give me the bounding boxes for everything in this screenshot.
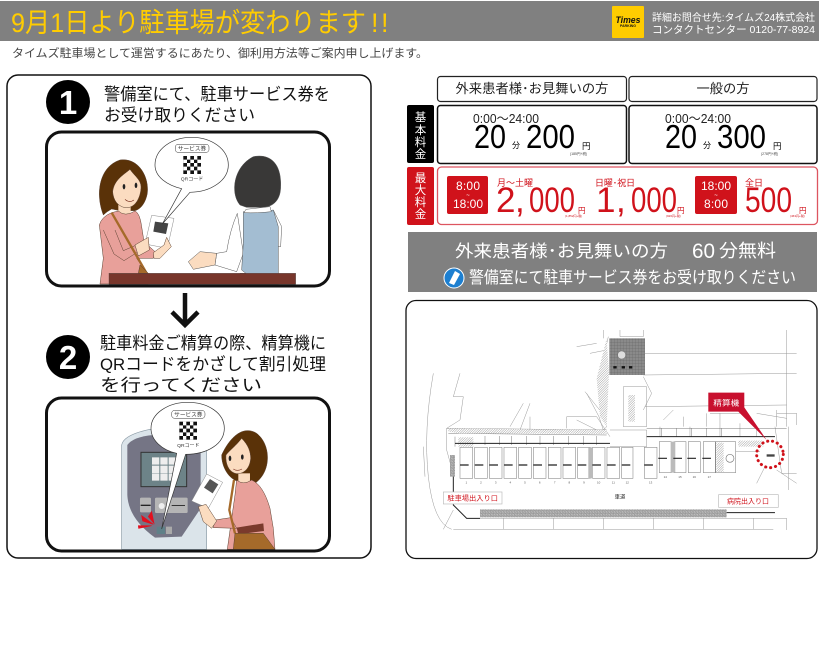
step 1 number: 1 [59, 84, 77, 121]
panel: usage steps [7, 75, 371, 558]
site plan [423, 330, 797, 530]
basic rate: general: (278円+税) [761, 151, 778, 156]
step 1 number [46, 80, 90, 124]
daytime badge: ~ [466, 193, 470, 199]
contact text: 詳細お問合せ先:タイムズ24株式会社 [652, 11, 815, 24]
step 2 text: を行ってください [100, 376, 262, 395]
Mon-Sat max: , [515, 181, 525, 220]
daytime badge: 8:00 [456, 179, 480, 193]
nighttime badge: 18:00 [701, 179, 731, 193]
bay numbers: 3 [495, 481, 497, 485]
label: car park entrance [443, 492, 502, 504]
callout: 60 minutes free [408, 232, 817, 292]
basic rate: general: 20 [665, 118, 697, 155]
red signal marks [138, 512, 154, 528]
speech bubble with QR code: QRコード [177, 443, 200, 449]
step 1 text [104, 85, 330, 125]
row label: basic rate: 本 [415, 123, 427, 137]
illustration: scanning QR at payment machine [46, 398, 330, 551]
daytime badge: 18:00 [453, 197, 483, 211]
payment machine [122, 429, 207, 549]
icon: Times logo: PARKING [620, 24, 636, 28]
icon: Times logo: Times [616, 15, 640, 25]
speech bubble with QR code: QRコード [181, 177, 203, 183]
marker: payment machine location [757, 441, 783, 468]
callout: payment machine [708, 393, 767, 440]
Mon-Sat max: 円 [578, 206, 586, 215]
column header: general [629, 76, 817, 102]
row label: basic rate: 基 [415, 111, 427, 124]
contact text: コンタクトセンター 0120-77-8924 [652, 24, 815, 36]
Sun-holiday max: (926円+税) [666, 213, 681, 218]
row label: basic rate: 料 [415, 135, 427, 149]
speech bubble with QR code: サービス券 [174, 410, 203, 418]
Mon-Sat max: 000 [529, 181, 575, 220]
callout: 60 minutes free: 分無料 [719, 241, 776, 261]
header bar [0, 1, 819, 41]
daytime badge [447, 176, 488, 214]
speech bubble with QR code [155, 137, 228, 224]
label: car park entrance: 駐車場出入り口 [447, 494, 498, 503]
title: ! [381, 8, 389, 38]
panel: pricing table [407, 76, 818, 225]
woman holding ticket [192, 431, 275, 549]
step 2 text: QRコードをかざして割引処理 [100, 354, 326, 374]
row label: maximum rate: 最 [415, 172, 427, 185]
bay numbers: 7 [554, 481, 556, 485]
contact text [652, 11, 815, 36]
callout: payment machine: 精算機 [713, 397, 740, 407]
bay numbers: 14 [664, 475, 667, 479]
icon: Times logo [612, 6, 644, 38]
hatched walls and tower [448, 338, 775, 518]
all day max: 500 [745, 181, 792, 220]
basic rate: general [629, 106, 817, 164]
step 1 text: お受け取りください [104, 106, 255, 125]
row label: maximum rate [407, 167, 434, 225]
basic rate: visitors: 200 [526, 118, 575, 155]
speech bubble with QR code [151, 402, 224, 529]
row label: basic rate: 金 [415, 148, 427, 161]
intro text: タイムズ駐車場として運営するにあたり、御利用方法等ご案内申し上げます。 [12, 46, 428, 60]
column header: general: 一般の方 [696, 81, 750, 96]
illustration: receiving ticket at guard room [46, 132, 330, 286]
bay numbers: 6 [539, 481, 541, 485]
title: 9月1日より駐車場が変わります [11, 8, 366, 38]
bay numbers: 8 [568, 481, 570, 485]
bay numbers: 1 [465, 481, 467, 485]
step 2 number: 2 [59, 339, 77, 376]
woman with ticket [99, 160, 174, 284]
column header: visitors: 外来患者様･お見舞いの方 [456, 81, 608, 96]
nighttime badge: ~ [714, 193, 718, 199]
step 2 text: 駐車料金ご精算の際、精算機に [100, 334, 326, 353]
all day max: (463円+税) [790, 213, 805, 218]
Mon-Sat max: 月～土曜 [497, 177, 533, 188]
all day max: 円 [799, 206, 806, 215]
nighttime badge: 8:00 [704, 197, 728, 211]
Sun-holiday max: 000 [631, 181, 677, 220]
callout: 60 minutes free: 60 [692, 240, 715, 263]
row label: maximum rate: 金 [415, 208, 427, 221]
bay numbers: 10 [597, 481, 601, 485]
step 2 number [46, 335, 90, 379]
Sun-holiday max: 円 [677, 206, 684, 215]
basic rate: visitors: 分 [512, 141, 520, 150]
staff member [188, 156, 282, 284]
row label: basic rate [407, 105, 434, 163]
basic rate: visitors: (185円+税) [570, 151, 587, 156]
basic rate: visitors [438, 106, 626, 164]
label: hospital entrance [719, 495, 778, 507]
bay numbers: 2 [480, 481, 482, 485]
Sun-holiday max [595, 177, 684, 220]
bay numbers: 11 [612, 481, 615, 485]
bay numbers: 9 [583, 481, 585, 485]
callout: 60 minutes free: 外来患者様･お見舞いの方 [455, 242, 668, 261]
road label: 車道 [615, 493, 626, 501]
Sun-holiday max: 日曜･祝日 [595, 177, 635, 188]
icon: hand with ticket [444, 268, 464, 288]
row label: maximum rate: 料 [415, 195, 427, 209]
basic rate: general: 分 [703, 141, 711, 150]
basic rate: general: 300 [717, 118, 766, 155]
step 1 text: 警備室にて、駐車サービス券を [104, 85, 330, 104]
label: hospital entrance: 病院出入り口 [727, 496, 769, 505]
bay numbers: 16 [693, 475, 696, 479]
bay numbers: 17 [708, 475, 711, 479]
nighttime badge [695, 176, 737, 214]
all day max: 全日 [745, 177, 763, 188]
arrow down [172, 293, 198, 325]
accessible bay [716, 442, 736, 473]
counter [109, 273, 296, 284]
Mon-Sat max [496, 177, 586, 220]
Sun-holiday max: 1 [596, 181, 615, 220]
panel: parking map [406, 300, 817, 558]
step 2 text [100, 334, 326, 395]
row label: maximum rate: 大 [415, 183, 427, 197]
bay numbers: 13 [649, 481, 653, 485]
basic rate: visitors: 円 [582, 141, 591, 151]
speech bubble with QR code: サービス券 [178, 144, 206, 152]
bay numbers: 5 [524, 481, 526, 485]
Mon-Sat max: (1,852円+税) [565, 213, 582, 218]
maximum rate box [438, 167, 818, 224]
bay numbers: 4 [509, 481, 511, 485]
Sun-holiday max: , [616, 181, 626, 220]
Mon-Sat max: 2 [496, 181, 515, 220]
bay numbers [465, 475, 711, 485]
bay numbers: 15 [678, 475, 682, 479]
title: ! [371, 8, 379, 38]
column header: visitors [438, 76, 626, 102]
basic rate: visitors: 0:00～24:00 [473, 112, 539, 126]
basic rate: visitors: 20 [474, 118, 506, 155]
basic rate: general: 円 [773, 141, 782, 151]
basic rate: general: 0:00～24:00 [665, 112, 731, 126]
parking bays [460, 442, 715, 478]
bay numbers: 12 [626, 481, 629, 485]
